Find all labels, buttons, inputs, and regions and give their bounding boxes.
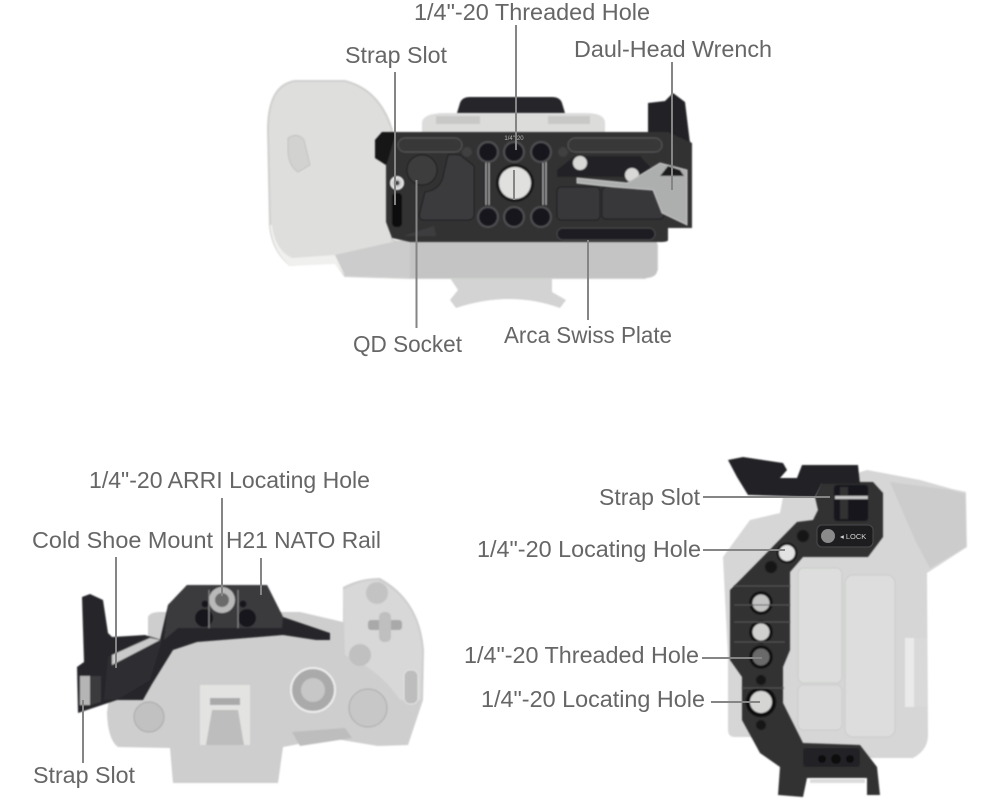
camera body, side view xyxy=(723,470,967,758)
leader: strap slot xyxy=(82,700,84,763)
label: strap slot: Strap Slot xyxy=(33,762,136,788)
label: cold shoe: Cold Shoe Mount xyxy=(32,527,214,553)
camera body, bottom view xyxy=(268,81,657,308)
leader: cold shoe xyxy=(115,557,117,668)
leader: ARRI hole xyxy=(221,498,223,596)
leader: Arca plate xyxy=(587,240,589,320)
Arca Swiss plate xyxy=(375,132,692,242)
top mount xyxy=(728,457,860,497)
strap slot xyxy=(834,485,868,521)
cage frame xyxy=(730,482,883,797)
panel: side view xyxy=(464,457,967,797)
label: threaded hole: 1/4"-20 Threaded Hole xyxy=(464,642,699,668)
label: locating hole lower: 1/4"-20 Locating Hole xyxy=(481,686,705,712)
label: QD socket: QD Socket xyxy=(353,331,463,357)
label: locating hole: 1/4"-20 Locating Hole xyxy=(477,536,701,562)
label: ARRI hole: 1/4"-20 ARRI Locating Hole xyxy=(89,467,370,493)
wrench xyxy=(577,163,687,225)
leader: wrench xyxy=(671,62,673,190)
label: strap slot: Strap Slot xyxy=(599,484,701,510)
panel: top view xyxy=(32,467,424,788)
cage holes xyxy=(734,530,865,783)
label: strap slot: Strap Slot xyxy=(345,42,448,68)
cage: top handle and side arm xyxy=(77,585,330,713)
leader: strap slot xyxy=(703,496,830,498)
leader: locating hole lower xyxy=(711,701,760,703)
plate engraving: 1/4"-20 xyxy=(504,136,524,142)
top mount block xyxy=(457,97,565,113)
leader: NATO rail xyxy=(260,558,262,595)
panel: bottom view xyxy=(268,0,772,357)
label: wrench: Daul-Head Wrench xyxy=(574,36,772,62)
lock plate: ◂ LOCK xyxy=(840,532,866,541)
leader: threaded hole xyxy=(514,25,516,200)
leader: strap slot xyxy=(394,72,396,205)
lock plate xyxy=(817,525,873,547)
leader: QD socket xyxy=(416,180,418,328)
label: Arca plate: Arca Swiss Plate xyxy=(504,322,672,348)
leader: locating hole xyxy=(703,549,785,551)
dual-head wrench holder xyxy=(648,93,690,150)
camera body, top view xyxy=(107,578,424,783)
label: NATO rail: H21 NATO Rail xyxy=(226,527,381,553)
leader: threaded hole xyxy=(702,657,762,659)
